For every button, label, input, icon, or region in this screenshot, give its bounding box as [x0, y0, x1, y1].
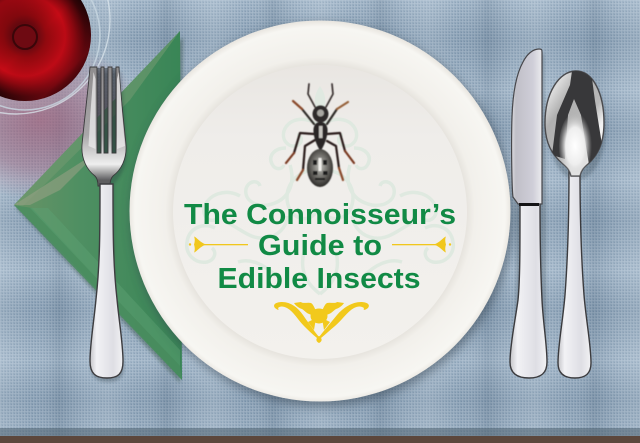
- ant body: [307, 106, 333, 187]
- spoon bowl: [545, 71, 604, 176]
- knife: [510, 49, 547, 378]
- title: The Connoisseur’s: [184, 199, 456, 231]
- knife handle: [510, 200, 547, 378]
- left divider flourish: [189, 236, 248, 252]
- napkin: [14, 31, 183, 383]
- fork handle: [90, 184, 123, 378]
- right divider flourish: [392, 236, 451, 252]
- fork shadow: [88, 72, 127, 382]
- ornament left wing: [274, 302, 319, 338]
- ant legs: [286, 101, 354, 180]
- knife shadow: [515, 53, 546, 373]
- spoon: [545, 71, 606, 378]
- fork highlights: [88, 72, 125, 149]
- ant antennae: [308, 84, 333, 107]
- spoon shadow: [548, 74, 606, 180]
- spoon handle: [558, 170, 591, 378]
- fork slots tint: [97, 68, 116, 153]
- plate: [130, 20, 513, 406]
- title: Guide to: [258, 230, 382, 262]
- ornament right wing: [319, 302, 369, 338]
- faint ornament watermark: [187, 86, 453, 294]
- fork tines and head: [82, 67, 126, 186]
- yellow ornament: [274, 302, 369, 343]
- spoon reflection: [552, 71, 603, 180]
- knife blade: [512, 49, 542, 204]
- ornament right half: [320, 119, 453, 294]
- wine glass: [0, 0, 110, 114]
- title: Edible Insects: [218, 263, 420, 295]
- wooden table edge: [0, 436, 640, 443]
- fork: [82, 67, 127, 382]
- wine stain reflection: [0, 40, 145, 200]
- ornament left half: [187, 119, 320, 294]
- title: [184, 199, 456, 295]
- icon: ant: [286, 84, 354, 187]
